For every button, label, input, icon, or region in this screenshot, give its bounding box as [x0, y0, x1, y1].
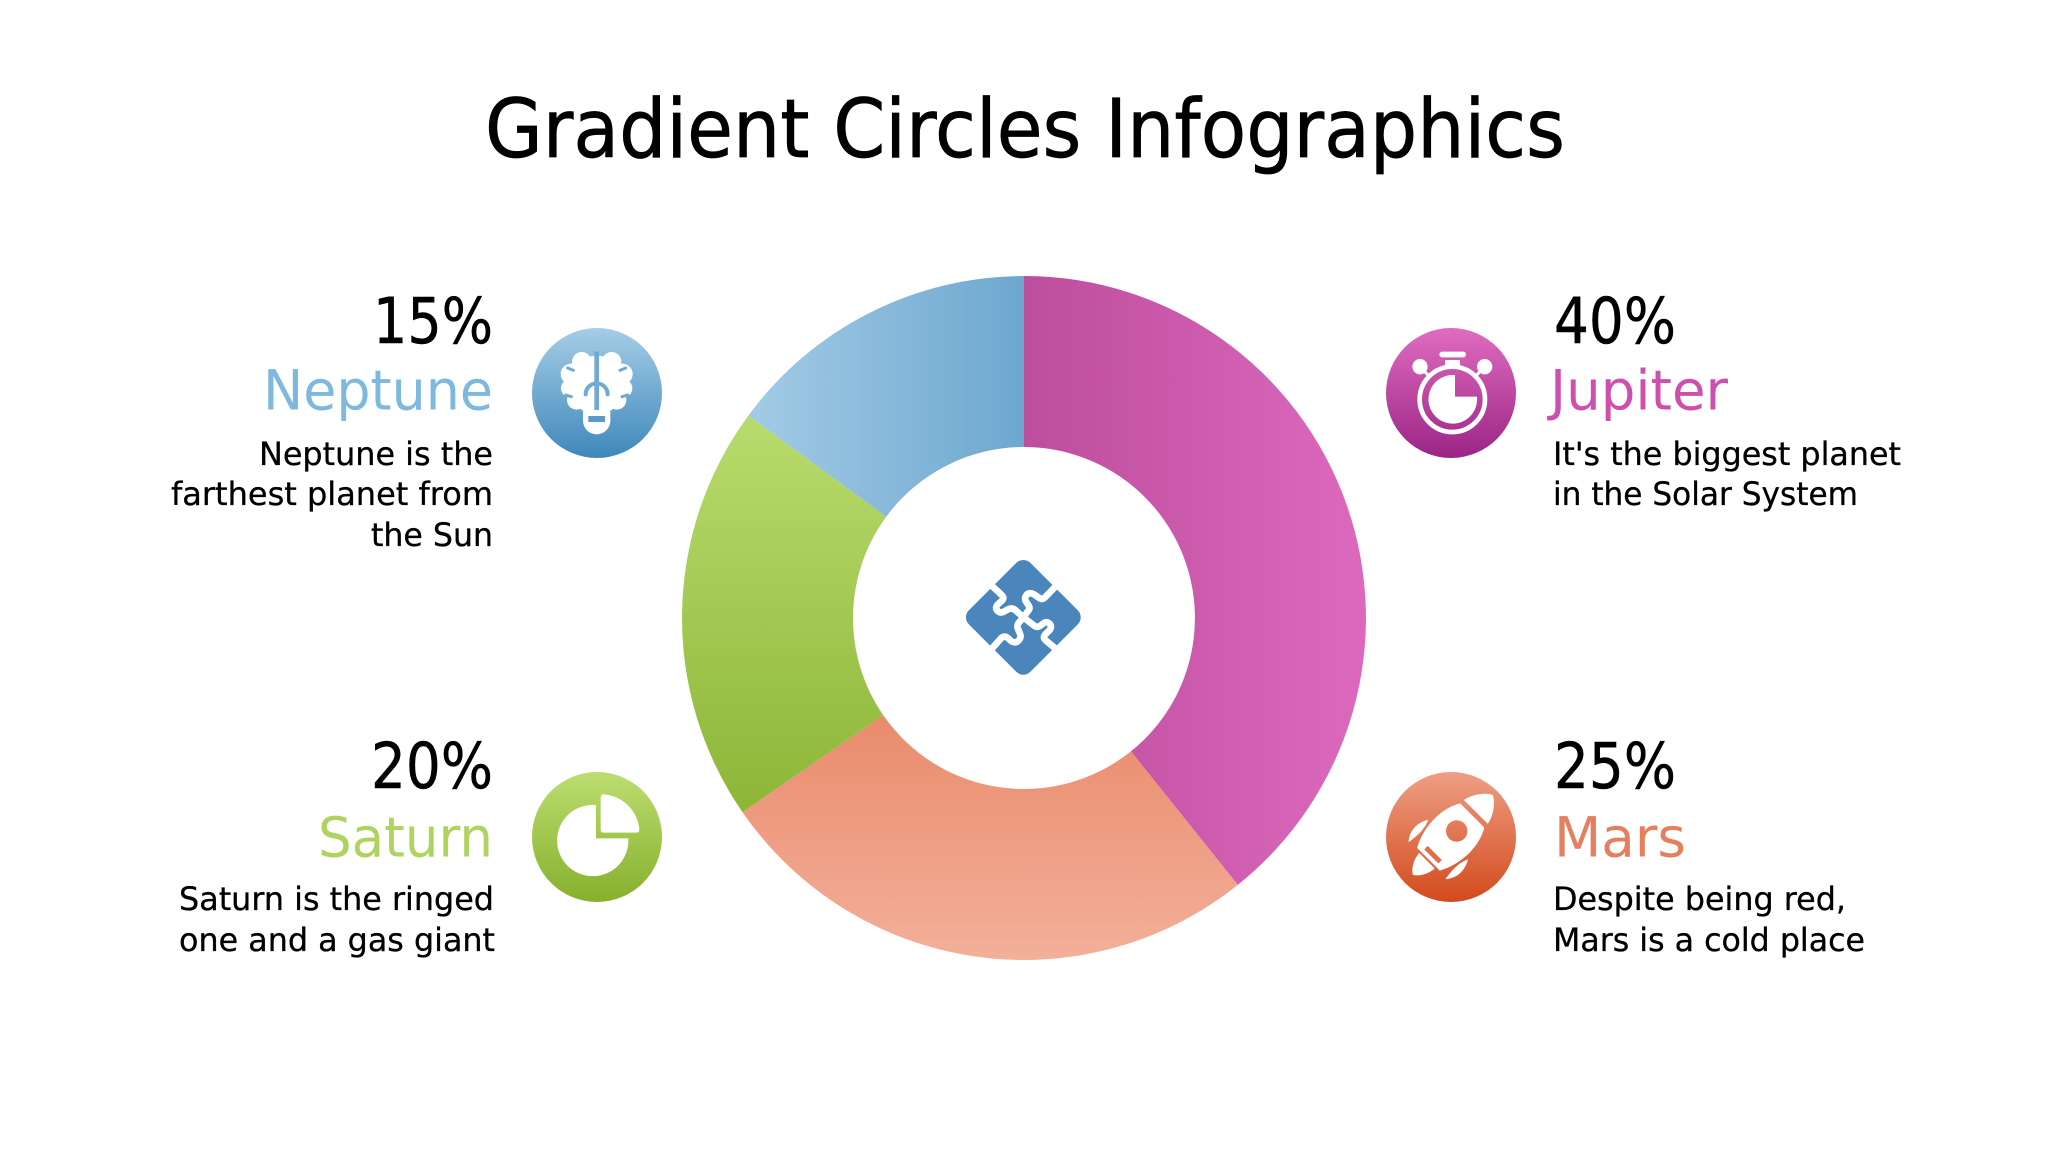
percentage: Jupiter: 40% [1554, 285, 1676, 358]
description: Jupiter: in the Solar System [1553, 475, 1858, 513]
segment: Jupiter 40% [1024, 276, 1366, 885]
segment: Neptune 15% [748, 276, 1024, 517]
description: Mars [1553, 880, 1865, 959]
icon: brain bulb [532, 328, 662, 458]
description: Mars: Mars is a cold place [1553, 921, 1865, 959]
name: Jupiter: Jupiter [1547, 358, 1728, 422]
percentage: Mars: 25% [1554, 730, 1676, 803]
icon: puzzle [962, 556, 1085, 679]
description: Saturn: one and a gas giant [179, 921, 495, 959]
description: Neptune: Neptune is the [259, 435, 493, 473]
percentage: Neptune: 15% [373, 285, 493, 358]
description: Jupiter [1553, 435, 1901, 513]
description: Saturn [179, 880, 495, 959]
title: Gradient Circles Infographics [485, 83, 1565, 177]
donut chart [682, 276, 1366, 960]
name: Neptune: Neptune [263, 358, 493, 422]
name: Saturn: Saturn [318, 806, 493, 870]
panel: Neptune [171, 285, 662, 554]
segment: Saturn 20% [682, 416, 886, 812]
panel: Saturn [179, 730, 662, 959]
name: Mars: Mars [1554, 806, 1686, 870]
icon: rocket [1386, 772, 1516, 902]
description: Neptune [171, 435, 493, 554]
segment: Mars 25% [742, 715, 1238, 960]
panel: Mars [1386, 730, 1865, 959]
description: Saturn: Saturn is the ringed [179, 880, 494, 918]
icon: stopwatch [1386, 328, 1516, 458]
percentage: Saturn: 20% [371, 730, 493, 803]
description: Neptune: the Sun [371, 516, 493, 554]
description: Jupiter: It's the biggest planet [1553, 435, 1901, 473]
panel: Jupiter [1386, 285, 1901, 513]
description: Mars: Despite being red, [1553, 880, 1846, 918]
icon: pie chart [532, 772, 662, 902]
description: Neptune: farthest planet from [171, 475, 493, 513]
